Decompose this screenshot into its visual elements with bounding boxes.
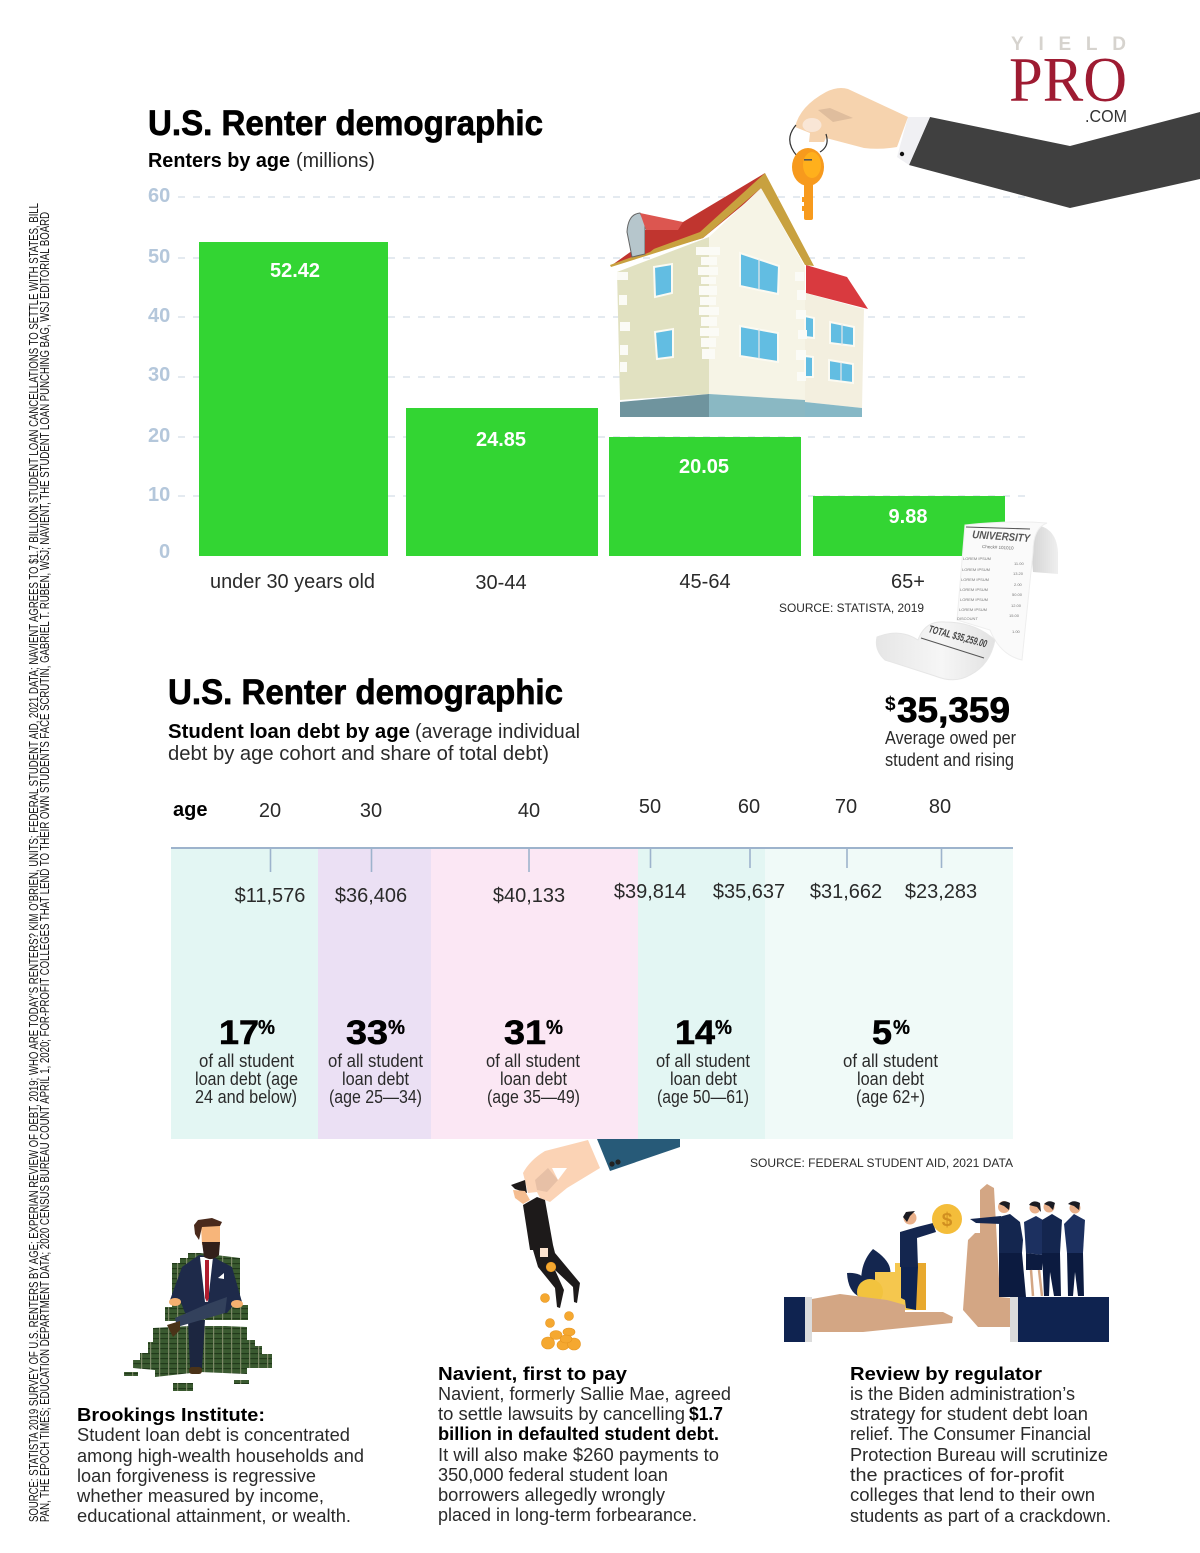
text block: Brookings Institute: whether measured by income,	[76, 1485, 324, 1506]
y axis labels: 30	[148, 364, 170, 386]
bar: 30-44: 30-44	[475, 572, 527, 594]
icon: university receipt: 1.00	[1012, 629, 1021, 634]
y axis labels: 20	[148, 425, 170, 447]
text block: Review by regulator: the practices of for-profit	[850, 1464, 1064, 1485]
band: age 35-49	[431, 848, 638, 1139]
debt amounts: $31,662	[810, 881, 882, 903]
text block: Brookings Institute: Student loan debt is concentrated	[77, 1424, 350, 1445]
band: age 24 and below	[171, 848, 318, 1139]
band: age 62+	[765, 848, 1013, 1139]
share: 31%: (age 35—49)	[487, 1087, 580, 1107]
text block: Review by regulator: strategy for student debt loan	[850, 1403, 1088, 1424]
subheading: student loan debt by age: (average individual	[415, 721, 580, 743]
band: age 50-61	[638, 848, 765, 1139]
y axis labels: 40	[148, 305, 170, 327]
icon: hand holding key	[790, 88, 1200, 220]
icon: university receipt: 2.00	[1014, 582, 1023, 587]
callout: average owed: Average owed per	[885, 728, 1016, 748]
share: 17%: %	[258, 1017, 275, 1039]
source: Statista: SOURCE: STATISTA, 2019	[779, 601, 924, 615]
subheading: renters by age: (millions)	[296, 150, 375, 172]
callout: average owed: 35,359	[897, 691, 1010, 730]
icon: university receipt: LOREM IPSUM	[959, 607, 987, 612]
age labels: age	[173, 799, 207, 821]
bar: under 30	[199, 242, 388, 593]
debt amounts: $11,576	[235, 885, 305, 907]
share: 31%: of all student	[486, 1051, 580, 1071]
icon: university receipt: Check# 101010	[982, 544, 1014, 551]
bar: 30-44	[406, 408, 598, 594]
text block: Review by regulator: colleges that lend to their own	[850, 1484, 1095, 1505]
text block: Review by regulator	[850, 1363, 1111, 1526]
person: man with crossed arms	[1064, 1201, 1085, 1296]
share: 17%: 24 and below)	[195, 1087, 297, 1107]
age labels: 80	[929, 796, 951, 818]
share: 33%: %	[388, 1017, 405, 1039]
share: 5%: of all student	[843, 1051, 938, 1071]
share: 14%: 14	[675, 1014, 715, 1052]
share: 17%: of all student	[199, 1051, 294, 1071]
icon: regulators stopping hand: $	[942, 1210, 953, 1231]
logo: Yield Pro: PRO	[1009, 44, 1127, 115]
text block: Brookings Institute: among high-wealth households and	[77, 1445, 364, 1466]
debt amounts: $39,814	[614, 881, 686, 903]
debt amounts: $23,283	[905, 881, 977, 903]
text block: Navient: to settle lawsuits by cancelling	[438, 1403, 685, 1424]
icon: bearded man on throne of cash	[124, 1218, 272, 1391]
share: 33%: loan debt	[342, 1069, 409, 1089]
bar chart: renters by age	[148, 185, 1028, 594]
icon: university receipt: DISCOUNT	[957, 616, 978, 621]
icon: university receipt: LOREM IPSUM	[963, 556, 991, 561]
y axis labels: 0	[159, 541, 170, 563]
icon: university receipt: LOREM IPSUM	[962, 567, 990, 572]
share: 33%	[328, 1014, 423, 1107]
share: 33%: of all student	[328, 1051, 423, 1071]
icon: university receipt	[876, 522, 1058, 680]
windows	[654, 253, 854, 383]
subheading: renters by age	[148, 150, 375, 172]
text block: Navient	[438, 1363, 731, 1525]
icon: hand dropping man and coins	[511, 1139, 680, 1350]
debt amounts	[235, 881, 977, 907]
share: 5%: %	[893, 1017, 910, 1039]
heading: U.S. Renter demographic, second: U.S. Renter demographic	[168, 673, 563, 712]
bar: under 30: 52.42	[270, 260, 320, 282]
age labels: 70	[835, 796, 857, 818]
bar: 45-64: 45-64	[679, 571, 731, 593]
share: 31%: loan debt	[500, 1069, 567, 1089]
dormer	[627, 213, 683, 257]
callout: average owed: student and rising	[885, 750, 1014, 770]
share: 17%	[195, 1014, 298, 1107]
brick corners	[617, 247, 807, 381]
icon: university receipt: LOREM IPSUM	[960, 597, 988, 602]
text block: Brookings Institute: Brookings Institute:	[77, 1404, 265, 1425]
debt amounts: $35,637	[713, 881, 785, 903]
debt amounts: $36,406	[335, 885, 407, 907]
text block: Review by regulator: relief. The Consumer Financial	[850, 1423, 1091, 1444]
sources sidebar	[27, 203, 52, 1522]
text block: Navient: $1.7	[689, 1403, 723, 1424]
text block: Review by regulator: is the Biden administration’s	[850, 1383, 1075, 1404]
callout: average owed: $	[885, 694, 896, 715]
share: 5%	[843, 1014, 938, 1107]
text block: Navient: billion in defaulted student debt.	[438, 1423, 719, 1444]
band: age 25-34	[318, 848, 431, 1139]
text block: Brookings Institute: loan forgiveness is regressive	[77, 1465, 316, 1486]
icon: house	[610, 173, 868, 417]
icon: university receipt: 11.00	[1014, 561, 1024, 566]
share: 14%: (age 50—61)	[657, 1087, 749, 1107]
bar: under 30: under 30 years old	[210, 571, 375, 593]
text block: Navient: 350,000 federal student loan	[438, 1464, 668, 1485]
y axis labels: 60	[148, 185, 170, 207]
text block: Navient: It will also make $260 payments to	[438, 1444, 719, 1465]
age labels	[173, 796, 951, 822]
callout: average owed	[885, 691, 1016, 770]
icon: university receipt: UNIVERSITY	[972, 529, 1032, 545]
share: 33%: 33	[346, 1014, 388, 1052]
share: 14%: loan debt	[670, 1069, 737, 1089]
source: Federal Student Aid: SOURCE: FEDERAL STUDENT AID, 2021 DATA	[750, 1156, 1013, 1170]
age labels: 50	[639, 796, 661, 818]
age labels: 20	[259, 800, 281, 822]
bar: 45-64	[609, 437, 801, 593]
icon: university receipt: 50.00	[1012, 592, 1023, 597]
text block: Navient: Navient, formerly Sallie Mae, agreed	[438, 1383, 731, 1404]
share: 5%: 5	[872, 1014, 892, 1052]
share: 31%: 31	[504, 1014, 546, 1052]
share: 31%: %	[546, 1017, 563, 1039]
bar: 65+	[813, 496, 1005, 593]
share: 14%	[656, 1014, 750, 1107]
share: 33%: (age 25—34)	[329, 1087, 422, 1107]
icon: university receipt: 12.00	[1011, 603, 1022, 608]
text block: Review by regulator: Review by regulator	[850, 1363, 1042, 1384]
logo: Yield Pro: YIELD	[1011, 34, 1126, 55]
share: 14%: %	[715, 1017, 732, 1039]
y axis labels: 50	[148, 246, 170, 268]
share: 17%: loan debt (age	[195, 1069, 298, 1089]
subheading: student loan debt by age: Student loan debt by age	[168, 721, 410, 743]
person: standing man	[1042, 1201, 1062, 1296]
text block: Brookings Institute	[76, 1404, 364, 1526]
icon: university receipt: LOREM IPSUM	[961, 577, 989, 582]
bar: 45-64: 20.05	[679, 456, 729, 478]
logo: Yield Pro: .COM	[1085, 106, 1127, 126]
bar: 65+: 65+	[891, 571, 925, 593]
y axis labels	[148, 185, 170, 563]
y axis labels: 10	[148, 484, 170, 506]
share: 5%: (age 62+)	[856, 1087, 925, 1107]
heading: U.S. Renter demographic: U.S. Renter demographic	[148, 104, 543, 143]
person pointing	[970, 1201, 1026, 1297]
share: 17%: 17	[219, 1014, 259, 1052]
subheading: renters by age: Renters by age	[148, 150, 290, 172]
text block: Navient: Navient, first to pay	[438, 1363, 628, 1384]
share: 31%	[486, 1014, 580, 1107]
icon: university receipt: LOREM IPSUM	[960, 587, 988, 592]
debt amounts: $40,133	[493, 885, 565, 907]
subheading: student loan debt by age	[168, 721, 580, 765]
icon: university receipt: TOTAL $35,259.00	[927, 623, 988, 650]
age labels: 40	[518, 800, 540, 822]
bar: 65+: 9.88	[889, 506, 927, 528]
icon: university receipt: 13.20	[1013, 571, 1024, 576]
text block: Navient: placed in long-term forbearance.	[438, 1504, 697, 1525]
subheading: student loan debt by age: debt by age cohort and share of total debt)	[168, 743, 549, 765]
text block: Review by regulator: students as part of a crackdown.	[850, 1505, 1111, 1526]
share: 5%: loan debt	[857, 1069, 924, 1089]
icon: university receipt: 15.00	[1009, 613, 1020, 618]
age labels: 30	[360, 800, 382, 822]
bar: 30-44: 24.85	[476, 429, 526, 451]
person: woman	[1024, 1201, 1043, 1296]
age timeline chart: student loan debt	[171, 796, 1013, 1139]
share: 14%: of all student	[656, 1051, 750, 1071]
age labels: 60	[738, 796, 760, 818]
text block: Navient: borrowers allegedly wrongly	[438, 1484, 666, 1505]
icon: regulators stopping hand	[784, 1184, 1109, 1342]
text block: Brookings Institute: educational attainment, or wealth.	[77, 1505, 351, 1526]
text block: Review by regulator: Protection Bureau will scrutinize	[850, 1444, 1108, 1465]
